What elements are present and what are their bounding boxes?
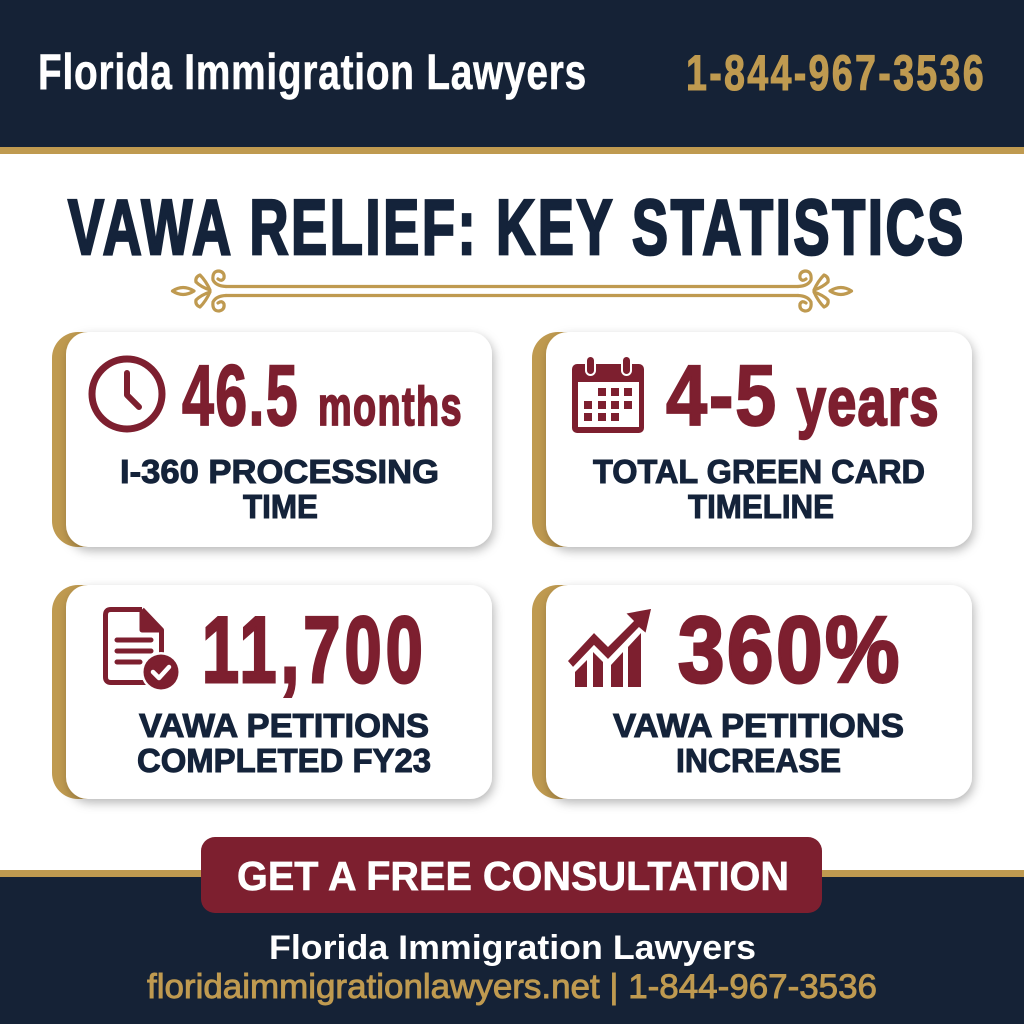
label: I-360 processing time [120, 453, 439, 525]
stat: 46.5 months: 46.5 [182, 348, 299, 444]
icon: rising bar chart with arrow [567, 608, 652, 687]
label: VAWA petitions increase [613, 707, 904, 779]
footer band [0, 837, 1024, 1024]
footer firm name: Florida Immigration Lawyers [269, 929, 756, 967]
icon: clock [92, 359, 162, 429]
stat: 4-5 years: 4-5 [666, 348, 778, 444]
label: VAWA petitions increase: VAWA PETITIONS [613, 707, 904, 744]
panel: I-360 processing time [52, 332, 492, 547]
label: VAWA petitions completed FY23: COMPLETED FY23 [137, 742, 431, 779]
icon: calendar [572, 356, 644, 433]
label: VAWA petitions increase: INCREASE [676, 742, 841, 779]
panel: VAWA petitions completed FY23 [52, 585, 492, 799]
label: VAWA petitions completed FY23 [137, 707, 431, 779]
stat: 46.5 months [182, 348, 463, 444]
stat: 4-5 years [666, 348, 940, 444]
label: VAWA petitions completed FY23: VAWA PETITIONS [139, 707, 429, 744]
footer website and phone: floridaimmigrationlawyers.net | 1-844-967-3536 [147, 968, 877, 1006]
label: total green card timeline [593, 453, 925, 525]
icon: document with check [106, 610, 181, 692]
label: I-360 processing time: I-360 PROCESSING [120, 453, 439, 490]
stat: 11,700: 11,700 [202, 597, 427, 702]
label: total green card timeline: TOTAL GREEN CARD [593, 453, 925, 490]
call to action button: GET A FREE CONSULTATION [237, 853, 789, 899]
ornamental divider [172, 271, 852, 311]
label: I-360 processing time: TIME [243, 488, 318, 525]
call to action button [201, 837, 822, 913]
header band [0, 0, 1024, 154]
label: total green card timeline: TIMELINE [688, 488, 834, 525]
stat: 46.5 months: months [318, 375, 463, 437]
header firm name: Florida Immigration Lawyers [38, 44, 587, 100]
stat: 4-5 years: years [797, 364, 940, 440]
stat: 360%: 360% [678, 597, 902, 702]
panel: VAWA petitions increase [532, 585, 972, 799]
panel: total green card timeline [532, 332, 972, 547]
